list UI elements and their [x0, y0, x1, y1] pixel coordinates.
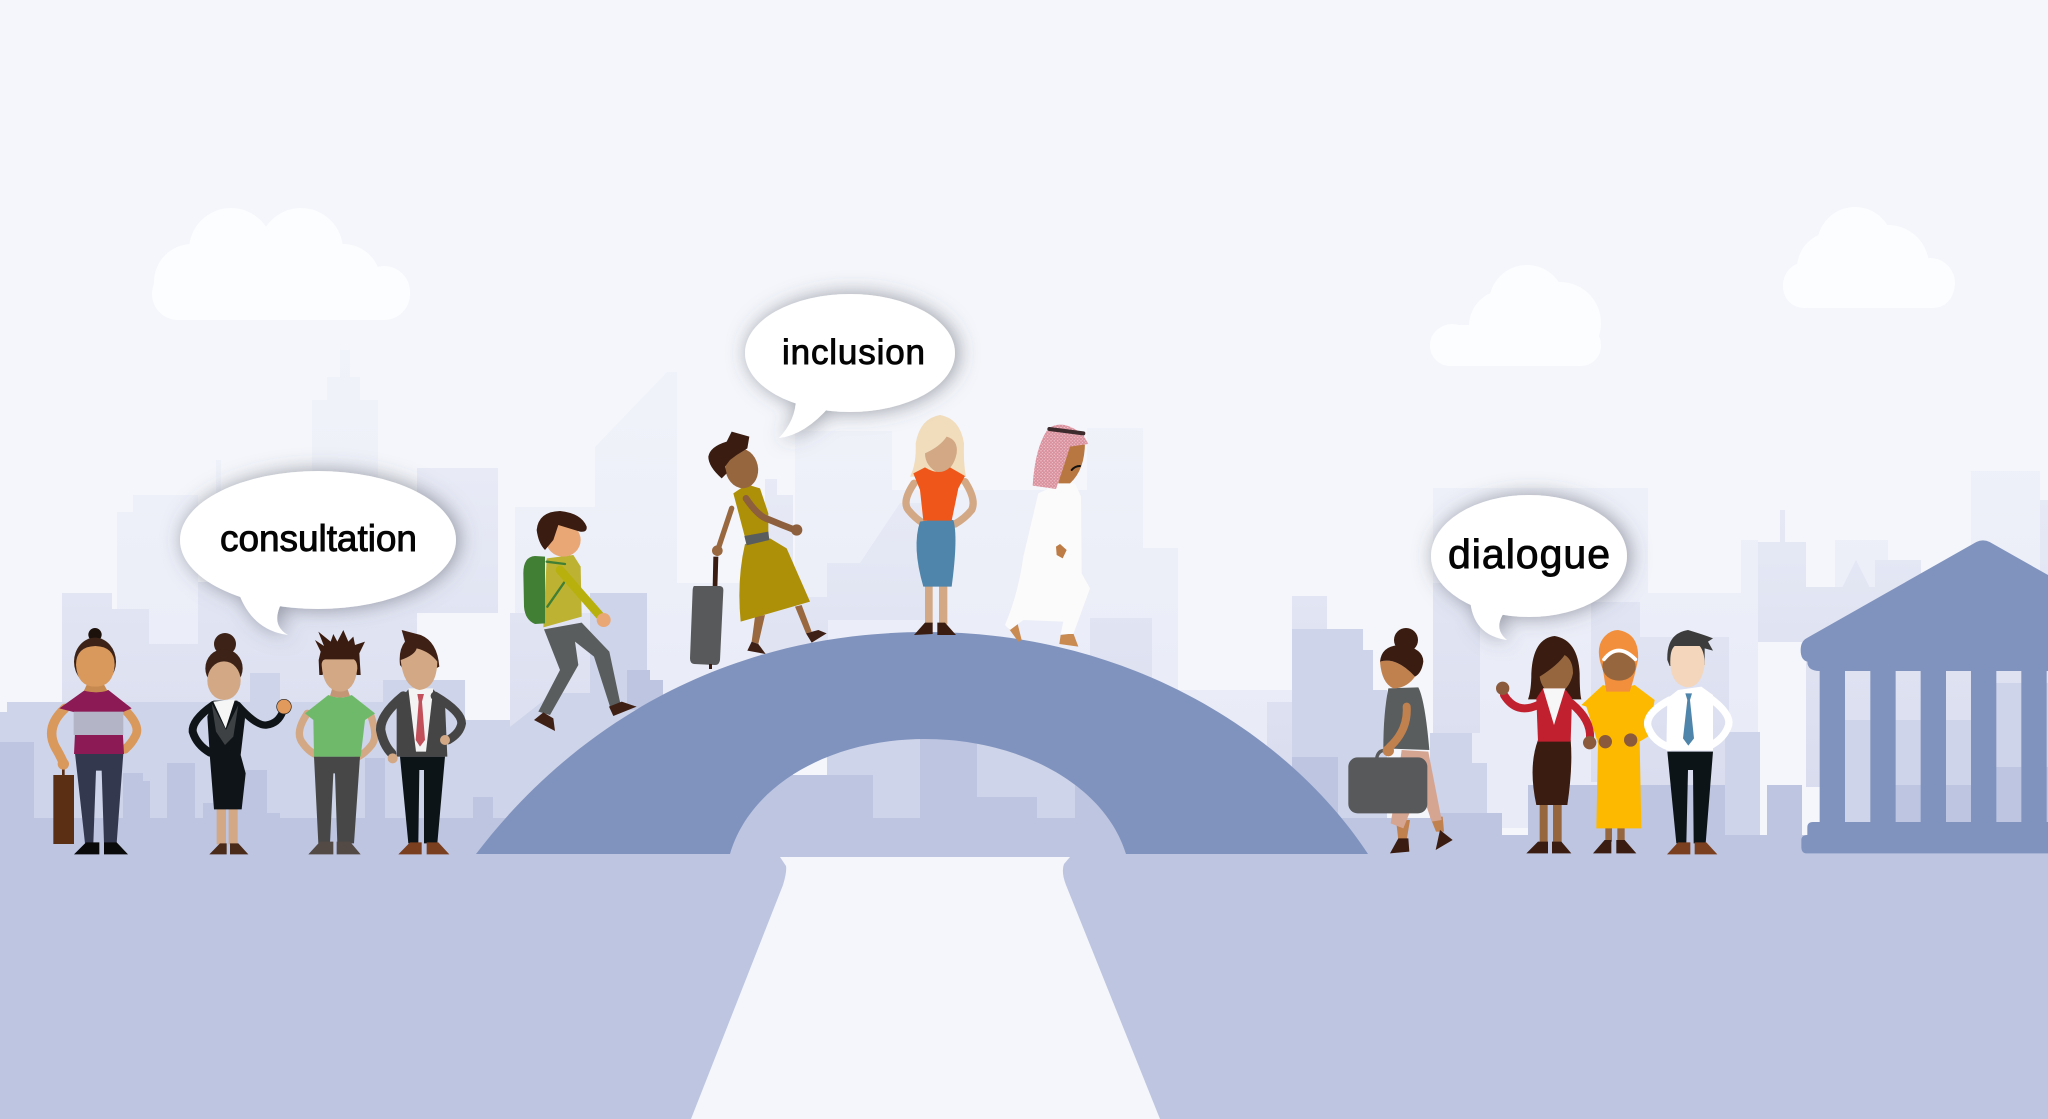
person: man in green t-shirt	[299, 630, 375, 854]
person: woman in black suit	[193, 633, 291, 854]
group centre: walkers on the bridge	[523, 415, 1090, 731]
bubble shape	[180, 471, 456, 635]
cloud left	[152, 208, 410, 320]
person: woman in grey with bag	[1348, 628, 1453, 853]
skyline background	[0, 350, 2048, 865]
person: man in white shirt and blue tie	[1648, 630, 1729, 854]
bubble: inclusion	[745, 294, 955, 438]
bubble: dialogue	[1431, 495, 1627, 640]
person: boy with green backpack	[523, 511, 637, 731]
bubble: consultation	[180, 471, 456, 635]
person: woman in olive dress with suitcase	[690, 432, 827, 669]
ground	[0, 854, 2048, 1119]
institution building	[1801, 540, 2048, 853]
label: dialogue	[1448, 531, 1610, 577]
person: woman in red blazer	[1496, 636, 1581, 853]
person: woman in yellow dress and orange hijab	[1571, 630, 1655, 853]
label: consultation	[220, 518, 417, 559]
person: man in striped shirt with briefcase	[52, 628, 137, 854]
label: inclusion	[782, 333, 925, 372]
clouds	[152, 207, 1955, 366]
road	[691, 857, 1160, 1119]
person: man in grey suit with red tie	[381, 630, 462, 854]
group left: four citizens	[52, 628, 462, 854]
cloud right	[1783, 207, 1955, 308]
person: man in white thobe and red headscarf	[1005, 425, 1090, 647]
person: blonde woman in orange top and blue skirt	[906, 415, 973, 635]
bridge	[476, 632, 1368, 854]
group right: four people near the institution	[1348, 628, 1729, 854]
cloud middle	[1430, 265, 1601, 366]
bubble shape	[1431, 495, 1627, 640]
bubble shape	[745, 294, 955, 438]
